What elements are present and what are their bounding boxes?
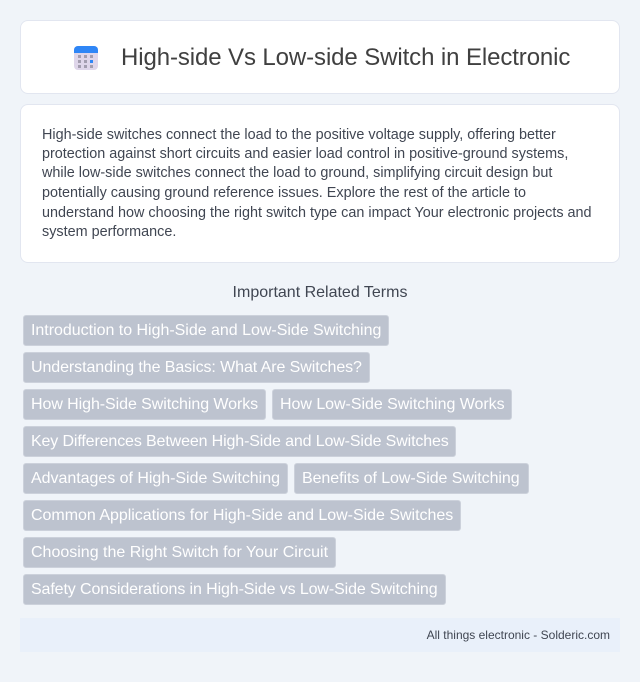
tag <box>23 315 389 346</box>
tag <box>23 500 461 531</box>
tag <box>23 389 266 420</box>
tag: How High-Side Switching Works <box>31 396 258 413</box>
tag: Common Applications for High-Side and Low-Side Switches <box>31 507 453 524</box>
tag <box>23 537 336 568</box>
footer bar <box>20 618 620 652</box>
summary card <box>20 104 620 263</box>
summary text: while low-side switches connect the load to ground, simplifying circuit design but <box>42 165 552 181</box>
tag: Understanding the Basics: What Are Switches? <box>31 359 362 376</box>
tag <box>272 389 512 420</box>
tag: How Low-Side Switching Works <box>280 396 505 413</box>
tag <box>23 426 456 457</box>
tag list <box>23 315 529 605</box>
summary text: High-side switches connect the load to the positive voltage supply, offering better <box>42 127 556 143</box>
footer text: All things electronic - Solderic.com <box>427 628 610 642</box>
header card <box>20 20 620 94</box>
tag: Safety Considerations in High-Side vs Low-Side Switching <box>31 581 438 598</box>
tag <box>23 352 370 383</box>
title: High-side Vs Low-side Switch in Electronic <box>121 44 570 71</box>
summary text <box>42 127 592 240</box>
tag: Key Differences Between High-Side and Low-Side Switches <box>31 433 449 450</box>
summary text: understand how choosing the right switch type can impact Your electronic projects and <box>42 205 592 221</box>
icon: calendar <box>74 46 98 70</box>
tag: Introduction to High-Side and Low-Side Switching <box>31 322 381 339</box>
tag: Benefits of Low-Side Switching <box>302 470 520 487</box>
tag: Choosing the Right Switch for Your Circuit <box>31 544 328 561</box>
summary text: protection against short circuits and easier load control in positive-ground systems, <box>42 146 568 162</box>
tag: Advantages of High-Side Switching <box>31 470 280 487</box>
tag <box>23 574 446 605</box>
summary text: system performance. <box>42 224 176 240</box>
tag <box>294 463 529 494</box>
summary text: potentially causing ground reference issues. Explore the rest of the article to <box>42 185 526 201</box>
heading: related terms: Important Related Terms <box>233 284 407 301</box>
tag <box>23 463 288 494</box>
